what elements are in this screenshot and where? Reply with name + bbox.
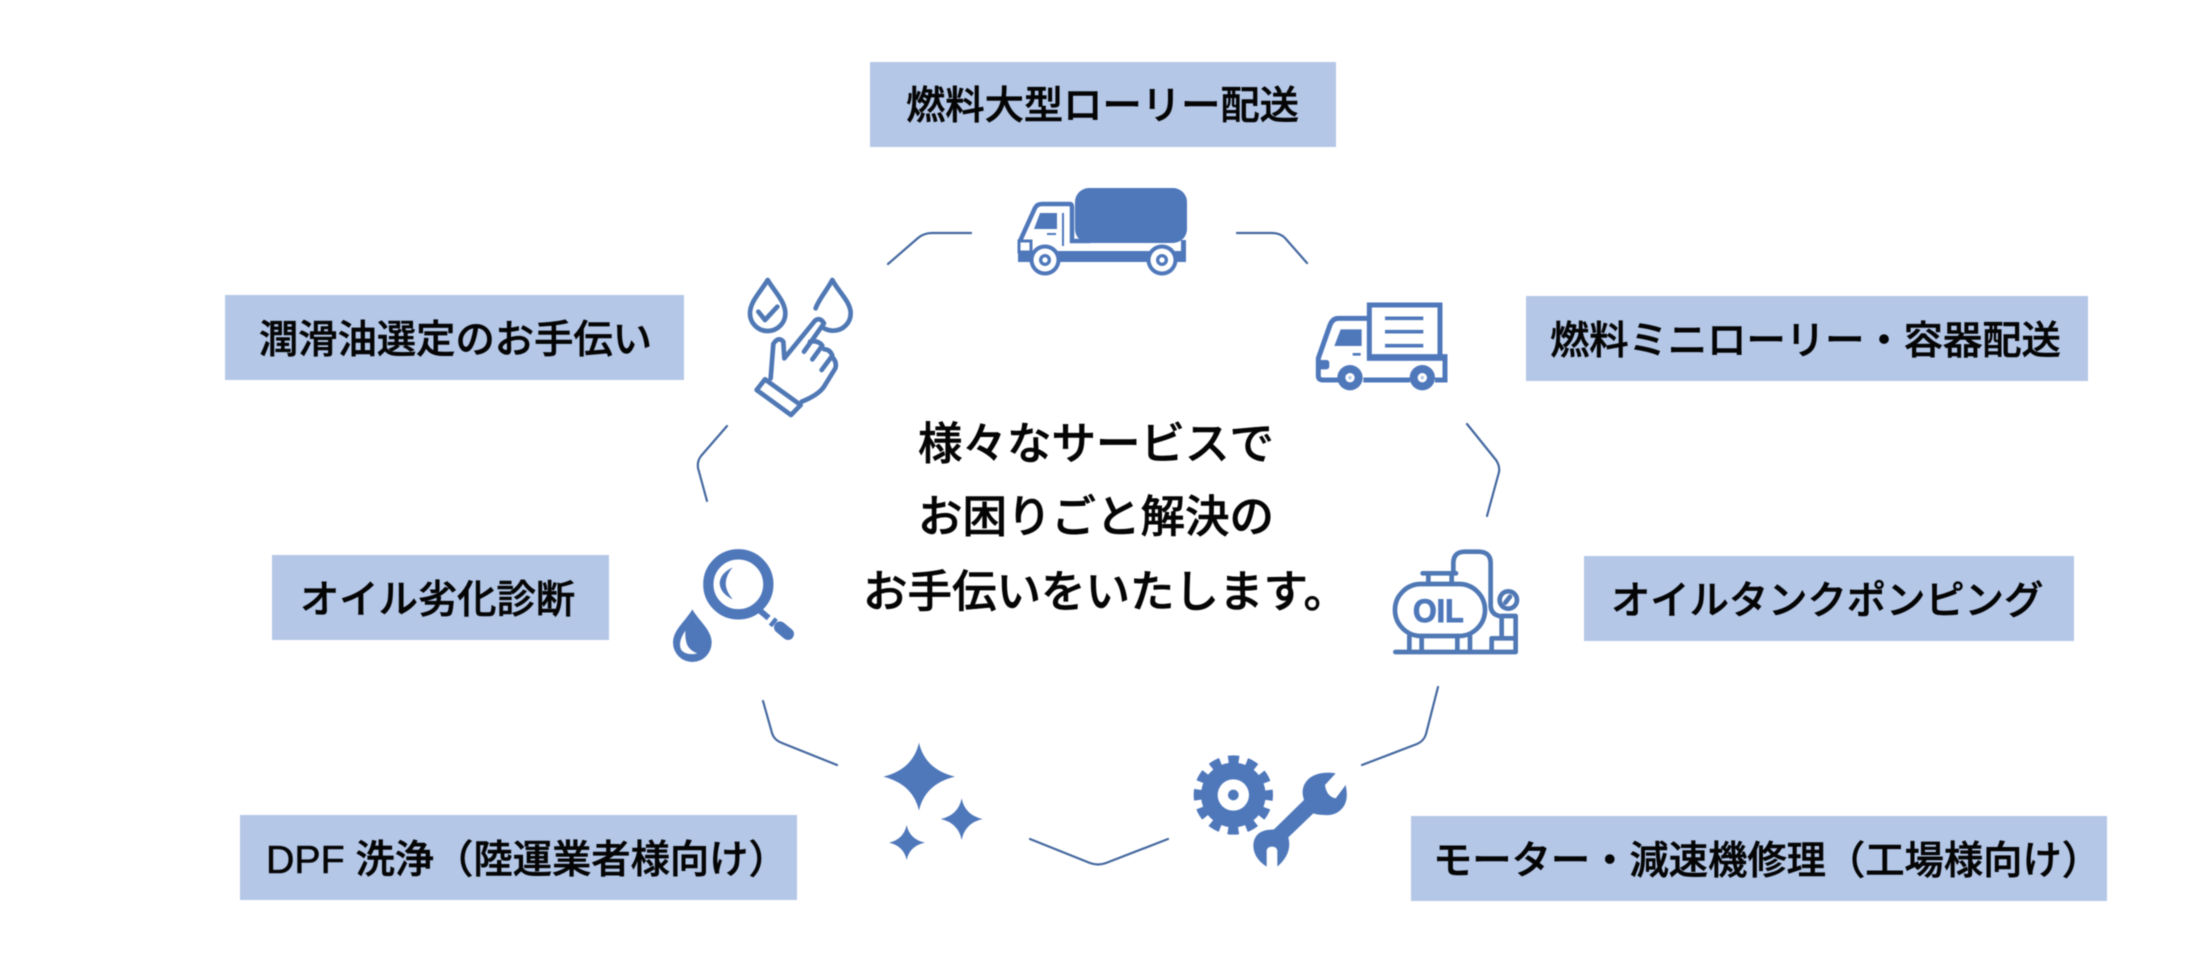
connector: top left [888, 233, 971, 264]
label: oil tank pumping: オイルタンクポンピング [1611, 579, 2043, 623]
wrench [1253, 773, 1347, 867]
gear [1198, 759, 1269, 831]
icon: oil tank [1395, 552, 1517, 652]
label: DPF cleaning: DPF 洗浄（陸運業者様向け） [266, 838, 788, 882]
label: mini tanker and container delivery [1526, 296, 2088, 381]
icon: tanker truck [1018, 188, 1187, 276]
icon: sparkles [883, 743, 983, 860]
label: large tanker delivery: 燃料大型ローリー配送 [906, 84, 1299, 128]
label: large tanker delivery [870, 62, 1336, 147]
icon: magnifier and oil drop [673, 554, 788, 662]
icon: mini truck [1317, 305, 1445, 390]
label: oil degradation diagnosis: オイル劣化診断 [300, 578, 575, 622]
connector: top right [1237, 233, 1307, 263]
label: lubricant selection [225, 295, 684, 380]
center message [863, 420, 1348, 617]
center message: お手伝いをいたします。 [863, 568, 1348, 617]
connector: right upper [1467, 424, 1499, 516]
label: oil degradation diagnosis [272, 555, 609, 640]
icon: gear and wrench [1198, 759, 1347, 867]
label: motor and reducer repair: モーター・減速機修理（工場様向け） [1433, 839, 2101, 883]
label: mini tanker and container delivery: 燃料ミニローリー・容器配送 [1550, 319, 2061, 363]
connector: left lower [763, 701, 837, 765]
icon: hand touching oil drops [750, 280, 851, 415]
icon: oil tank: OIL [1413, 592, 1464, 629]
label: oil tank pumping [1584, 556, 2074, 641]
connector: right lower [1362, 687, 1438, 765]
connector: bottom [1030, 839, 1168, 864]
center message: 様々なサービスで [918, 420, 1274, 469]
center message: お困りごと解決の [918, 493, 1274, 542]
connector: left upper [698, 426, 727, 501]
label: DPF cleaning [240, 815, 797, 900]
label: lubricant selection: 潤滑油選定のお手伝い [259, 318, 652, 362]
label: motor and reducer repair [1411, 816, 2107, 901]
